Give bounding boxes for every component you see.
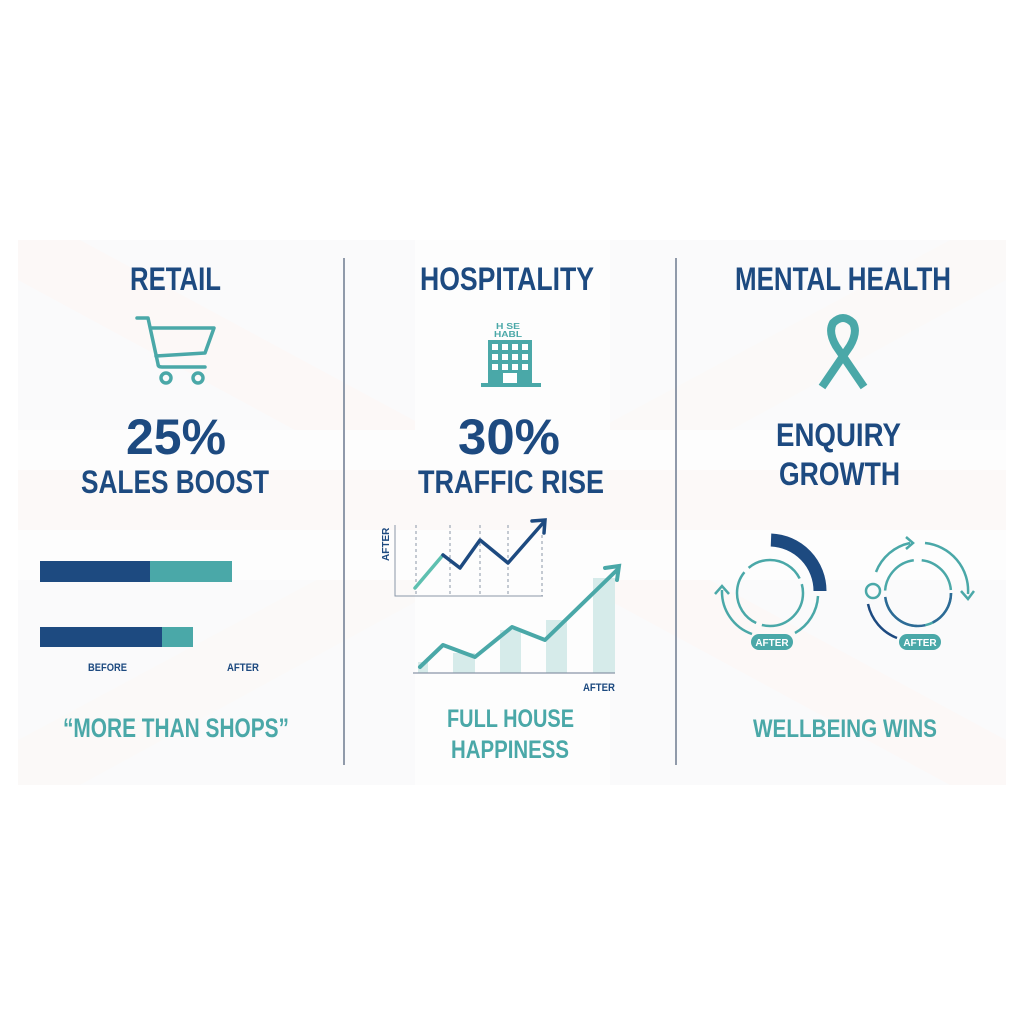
panel: hospitality [381,261,619,764]
caption: wellbeing wins: WELLBEING WINS [753,715,937,743]
heading: retail: RETAIL [130,261,221,297]
line chart: large: AFTER [583,682,615,694]
icon: cycle with progress: AFTER [755,638,789,649]
stat: 25%: 25% [126,409,226,465]
panel: retail [40,261,289,743]
icon: cycle arrows: AFTER [903,638,937,649]
dividers [343,258,345,765]
label: traffic rise: TRAFFIC RISE [418,464,604,500]
caption: full house happiness: FULL HOUSE [447,705,574,733]
panel: mental health: GROWTH [779,456,900,492]
label: sales boost: SALES BOOST [81,464,269,500]
panel: mental health [715,261,974,743]
icon: hotel building [481,322,541,387]
quote: “MORE THAN SHOPS” [63,713,289,743]
bar chart: before/after: BEFORE [88,662,127,674]
bar chart: before/after: AFTER [227,662,259,674]
panel: hospitality: HAPPINESS [451,736,569,764]
line chart: small: AFTER [381,527,392,561]
icon: hotel building: HABL [494,330,522,339]
stat: 30%: 30% [458,409,560,465]
label: enquiry growth: ENQUIRY [776,417,901,453]
icon: cycle with progress [715,540,820,650]
bar chart: before/after [40,561,259,674]
line chart: small [381,520,545,596]
icon: hotel building: H SE [496,322,521,331]
background flag [18,240,1006,785]
icon: cycle arrows [866,537,974,650]
icon: shopping cart [137,318,214,383]
line chart: large [413,566,619,694]
heading: hospitality: HOSPITALITY [420,261,594,297]
icon: awareness ribbon [822,318,864,387]
heading: mental health: MENTAL HEALTH [735,261,951,297]
